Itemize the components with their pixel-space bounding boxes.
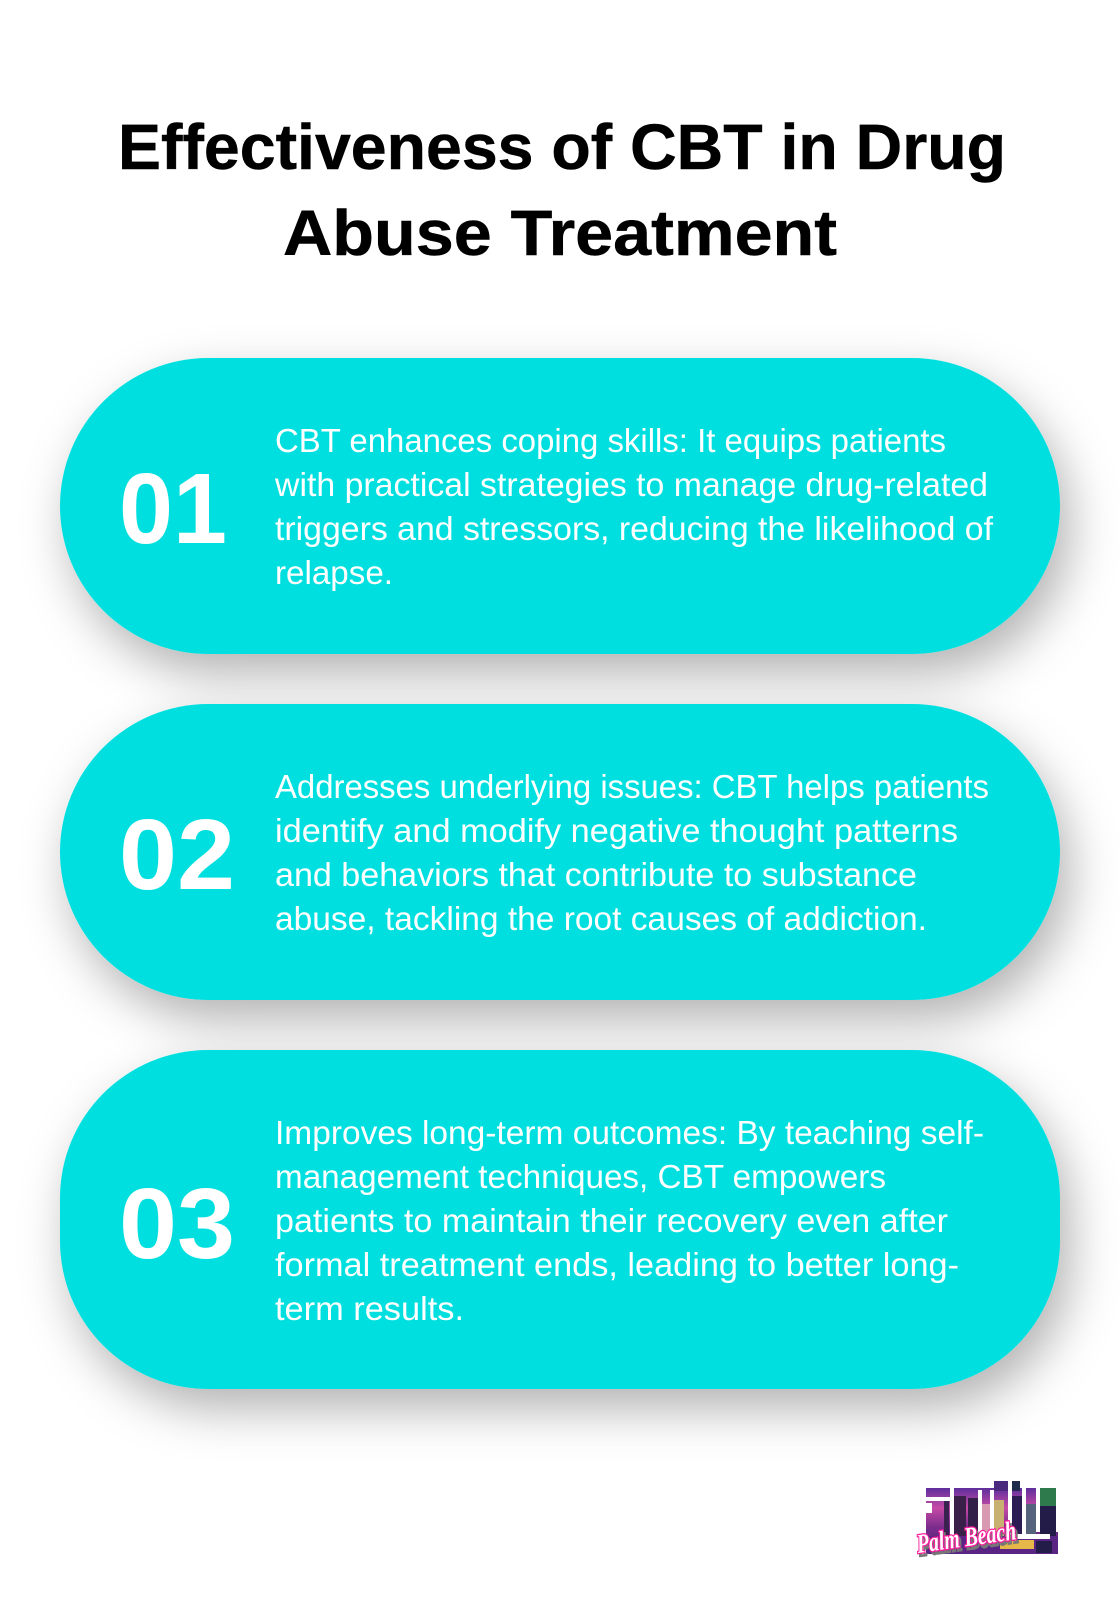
text: coping skills: CBT enhances coping skills: It equips patients <box>275 422 946 459</box>
pill background 01 <box>60 358 1060 654</box>
panel: step 02 <box>60 704 1060 1000</box>
number 03: 03 <box>119 1168 235 1280</box>
text: long-term outcomes: formal treatment ends, leading to better long- <box>275 1246 959 1283</box>
text: underlying issues: Addresses underlying issues: CBT helps patients <box>275 768 989 805</box>
text: long-term outcomes: Improves long-term outcomes: By teaching self- <box>275 1114 984 1151</box>
number 02: 02 <box>119 799 235 911</box>
text: long-term outcomes: term results. <box>275 1290 464 1327</box>
title: Effectiveness of CBT in Drug <box>118 111 1006 183</box>
logo <box>914 1478 1058 1562</box>
text: underlying issues: and behaviors that contribute to substance <box>275 856 917 893</box>
panel: step 01 <box>60 358 1060 654</box>
logo script: Palm Beach: Palm Beach <box>914 1515 1018 1559</box>
text: coping skills: relapse. <box>275 554 393 591</box>
text: underlying issues: identify and modify negative thought patterns <box>275 812 958 849</box>
logo script shadow: Palm Beach <box>916 1518 1020 1562</box>
pill background 03 <box>60 1050 1060 1389</box>
text: long-term outcomes: management techniques, CBT empowers <box>275 1158 886 1195</box>
text: long-term outcomes: patients to maintain their recovery even after <box>275 1202 948 1239</box>
title: Abuse Treatment <box>283 197 837 269</box>
text: coping skills: with practical strategies to manage drug-related <box>274 466 988 503</box>
text: long-term outcomes <box>275 1114 984 1327</box>
text: underlying issues <box>275 768 989 937</box>
panel: step 03 <box>60 1050 1060 1389</box>
title <box>118 111 1006 269</box>
logo white letter cuts <box>926 1478 1058 1539</box>
text: underlying issues: abuse, tackling the root causes of addiction. <box>275 900 927 937</box>
number 01: 01 <box>119 453 227 565</box>
logo image block <box>926 1481 1058 1554</box>
text: coping skills: triggers and stressors, reducing the likelihood of <box>275 510 994 547</box>
pill background 02 <box>60 704 1060 1000</box>
text: coping skills <box>274 422 994 591</box>
